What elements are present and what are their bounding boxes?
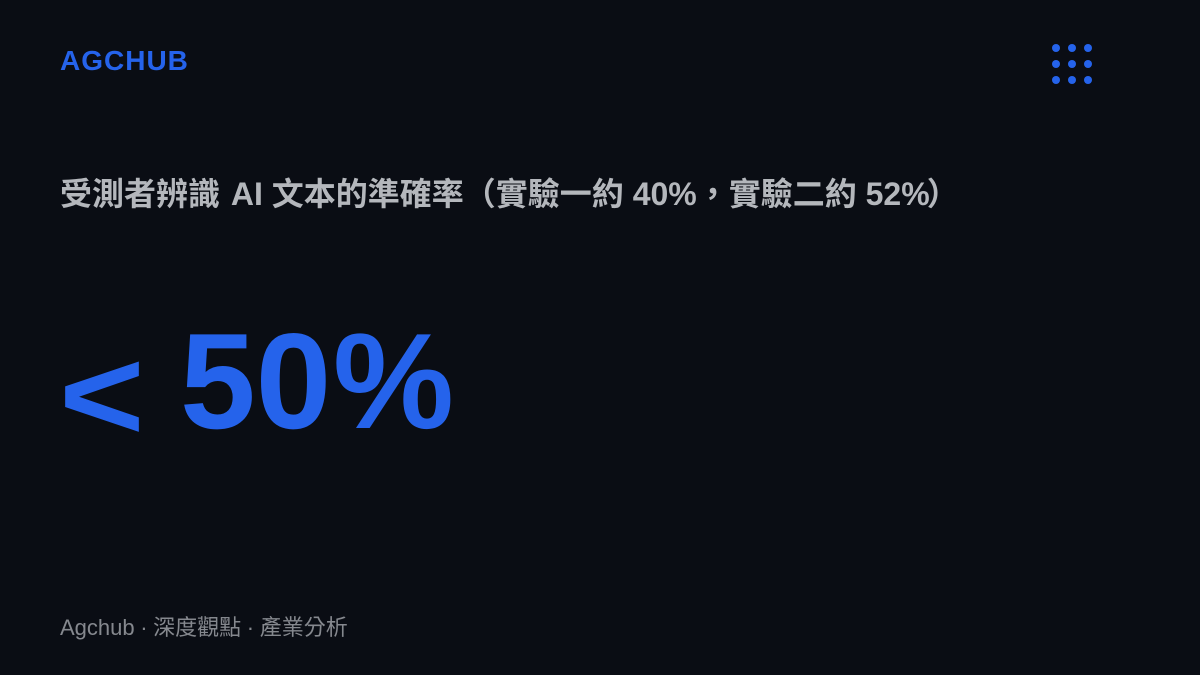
heading: accuracy description: 受測者辨識 AI 文本的準確率（實驗一約 40%，實驗二約 52%） — [60, 176, 959, 212]
brand logo text: AGCHUB — [60, 45, 189, 76]
footer text: Agchub · 深度觀點 · 產業分析 — [60, 615, 348, 640]
big statistic — [58, 305, 454, 468]
big statistic: 50 — [180, 305, 331, 457]
big statistic: % — [333, 305, 454, 457]
icon: dot grid — [1052, 44, 1092, 84]
big statistic: < — [58, 322, 144, 468]
